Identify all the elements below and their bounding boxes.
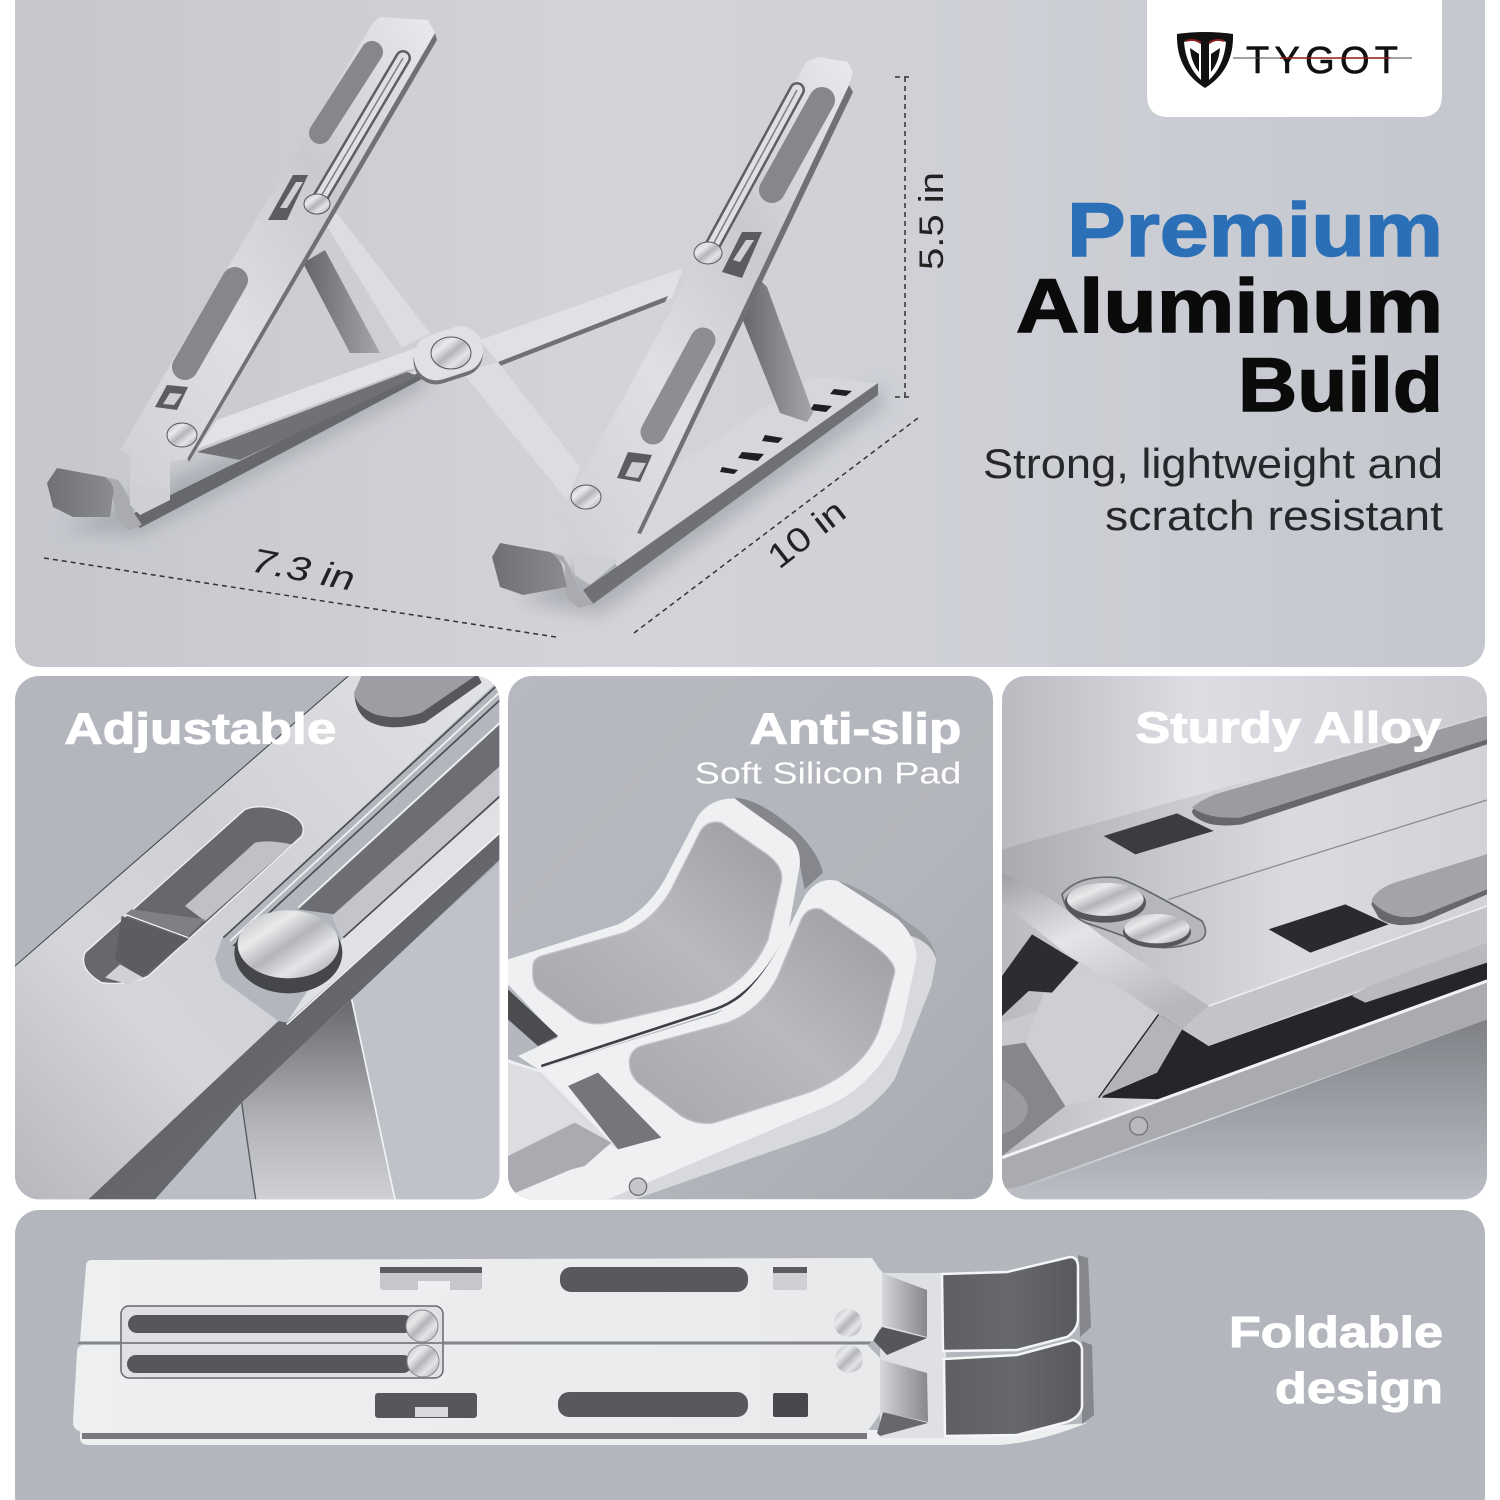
rail side strips: [298, 724, 500, 914]
rear hinge plate: [880, 1273, 946, 1438]
slots: [375, 1267, 482, 1418]
screws: [304, 194, 330, 214]
dimension: height: 5.5 in: [913, 172, 951, 270]
wordmark: TYGOT: [1246, 40, 1398, 82]
slot: [317, 58, 403, 203]
centre pads: [560, 1267, 748, 1292]
lower hinge: [867, 1345, 928, 1436]
rear base: [1002, 1012, 1036, 1046]
silicone pad: [354, 676, 482, 727]
right base plate: [583, 377, 878, 604]
label: Foldable design: design: [1275, 1364, 1443, 1413]
plate side face: [88, 833, 500, 1199]
illustration: laptop stand with dimensions: [47, 17, 885, 615]
heading: Premium Aluminum Build: Aluminum: [1016, 264, 1443, 349]
subheading: [983, 440, 1443, 539]
holes: [268, 175, 308, 220]
slot: [710, 90, 797, 250]
pad edges: [735, 798, 823, 889]
heading: Premium Aluminum Build: [1016, 188, 1443, 428]
centre hinge: [408, 321, 489, 390]
hub to right bar: [480, 268, 683, 366]
label: Foldable design: Foldable: [1229, 1308, 1443, 1357]
rail screw: [1130, 1117, 1148, 1135]
left foot: [47, 468, 170, 530]
dimension: width: 7.3 in: [248, 542, 358, 599]
seam: [1169, 800, 1487, 899]
knob: [234, 910, 342, 993]
base strip: [80, 1423, 1087, 1445]
right arm: [557, 57, 853, 560]
panel: sturdy alloy: [1002, 676, 1487, 1199]
dimension: depth: 10 in: [761, 492, 853, 576]
brace bar: [323, 213, 430, 348]
arm front edge: [1182, 906, 1487, 1046]
arm plate: [1002, 714, 1487, 1006]
twin screws: [1062, 877, 1205, 948]
panel: adjustable: [15, 676, 500, 1199]
holes: [722, 232, 762, 278]
base rail: [1002, 979, 1487, 1189]
upper plate: [80, 1258, 882, 1341]
left arm: [120, 17, 437, 490]
hinge arm: [508, 1063, 618, 1156]
hub to lower right leg: [462, 362, 580, 500]
soft shadows: [60, 365, 885, 615]
label: Adjustable: Adjustable: [64, 704, 336, 753]
cutouts: [508, 989, 558, 1046]
metal plate: [15, 676, 500, 1199]
right back leg: [740, 277, 813, 422]
left base plate: [130, 368, 424, 528]
label: Anti-slip: Anti-slip: [750, 704, 961, 753]
square holes: [1104, 813, 1214, 854]
lower plate: [73, 1345, 880, 1432]
screws: [694, 242, 722, 264]
lower right background: [352, 863, 500, 1199]
lower foot: [944, 1340, 1094, 1436]
dark shadow: [1102, 963, 1487, 1099]
screws: [406, 1310, 438, 1342]
heading: Premium Aluminum Build: Build: [1238, 343, 1443, 428]
dimension: height: [895, 77, 951, 397]
subheading: scratch resistant: [1105, 492, 1443, 539]
label: Soft Silicon Pad: Soft Silicon Pad: [695, 755, 961, 790]
left pad stub: [1002, 1079, 1028, 1134]
lower left bar: [197, 335, 440, 460]
lower foot: [508, 880, 916, 1199]
upper foot: [508, 799, 800, 1069]
panel: foldable: [15, 1210, 1485, 1500]
dimension: depth: [634, 418, 918, 633]
folded leg: [1025, 949, 1182, 1106]
support leg: [242, 999, 395, 1199]
silicone pads: [1192, 716, 1487, 925]
channel: [121, 1306, 443, 1378]
heading: Premium Aluminum Build: Premium: [1067, 188, 1443, 273]
wedge: [1099, 1014, 1182, 1098]
adjustment slot: [84, 807, 303, 984]
panel: hero background: [15, 0, 1485, 667]
upper hinge: [870, 1262, 927, 1355]
pads: [772, 100, 822, 190]
label: Foldable design: [1229, 1308, 1443, 1413]
icon: shield: [1177, 32, 1233, 88]
panel: anti-slip: [508, 676, 993, 1199]
subheading: Strong, lightweight and: [983, 440, 1443, 487]
small holes: [773, 1267, 807, 1290]
illustration: folded stand: [73, 1255, 1094, 1445]
pivot: [629, 1178, 647, 1195]
upper foot: [942, 1255, 1091, 1351]
pads: [320, 52, 372, 133]
right foot: [492, 520, 618, 608]
dimension: width: [44, 542, 556, 637]
rail lines: [223, 683, 500, 1024]
long pads: [128, 1315, 413, 1333]
left back leg and brace: [303, 250, 380, 353]
label: Sturdy Alloy: Sturdy Alloy: [1135, 704, 1442, 753]
logo card: [1147, 0, 1442, 117]
lower background: [1002, 1019, 1487, 1199]
